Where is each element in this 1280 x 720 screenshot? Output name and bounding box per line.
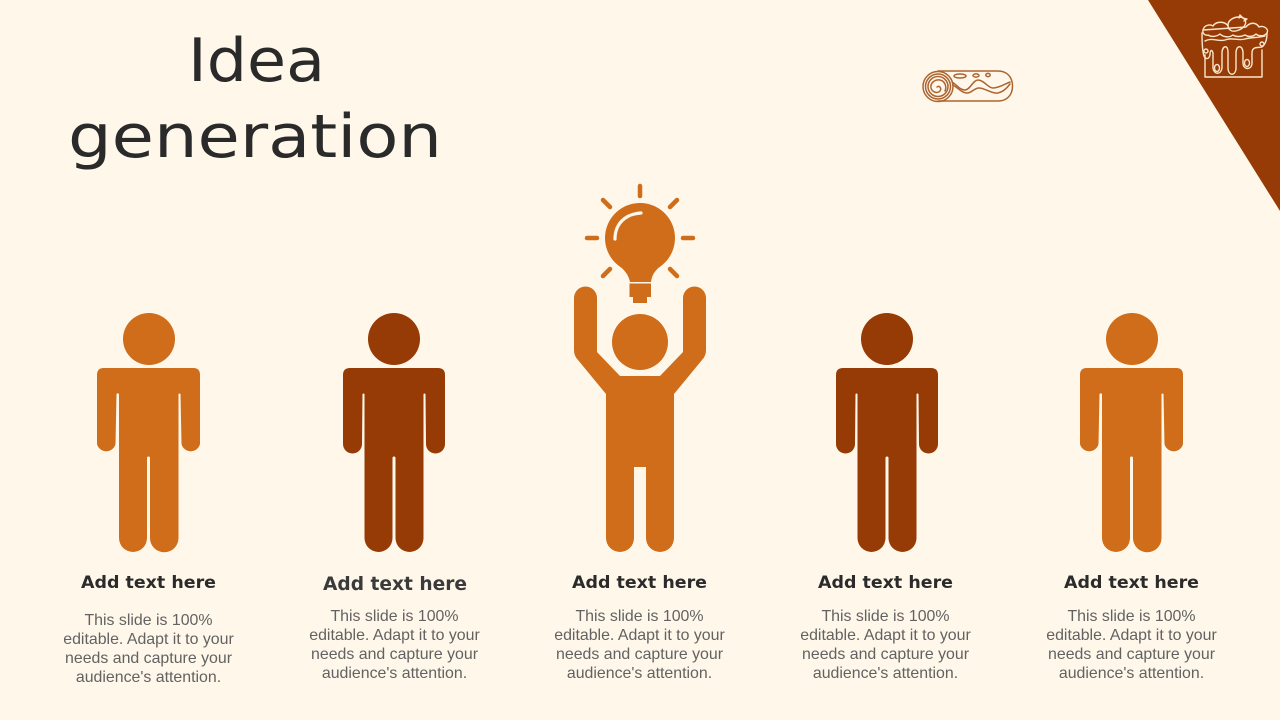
text block 4: needs and capture your <box>802 646 970 663</box>
title: Idea <box>188 26 325 96</box>
text block 3: This slide is 100% <box>575 608 704 625</box>
text block 1: needs and capture your <box>65 650 233 667</box>
title <box>68 26 442 172</box>
text block 3 <box>554 573 725 682</box>
text block 1 <box>63 573 234 686</box>
icon: swiss roll <box>923 71 1012 102</box>
text block 3: audience's attention. <box>567 665 712 682</box>
person 5 <box>1080 313 1183 552</box>
text block 3: Add text here <box>572 573 707 593</box>
text block 5: This slide is 100% <box>1067 608 1196 625</box>
title: generation <box>68 102 442 172</box>
text block 2 <box>309 573 480 682</box>
text block 5 <box>1046 573 1217 682</box>
text block 3: needs and capture your <box>556 646 724 663</box>
text block 2: needs and capture your <box>311 646 479 663</box>
text block 4: This slide is 100% <box>821 608 950 625</box>
text block 4 <box>800 573 971 682</box>
person 2 <box>343 313 445 552</box>
person 4 <box>836 313 938 552</box>
text block 2: Add text here <box>323 573 467 595</box>
text block 1: Add text here <box>81 573 216 593</box>
text block 4: editable. Adapt it to your <box>800 627 971 644</box>
icon: cake <box>1202 15 1267 77</box>
text block 2: editable. Adapt it to your <box>309 627 480 644</box>
text block 5: needs and capture your <box>1048 646 1216 663</box>
text block 5: audience's attention. <box>1059 665 1204 682</box>
person 3 with raised arms <box>574 286 706 552</box>
icon: light bulb <box>587 186 693 303</box>
person 1 <box>97 313 200 552</box>
text block 2: audience's attention. <box>322 665 467 682</box>
corner triangle <box>1148 0 1280 211</box>
text block 5: editable. Adapt it to your <box>1046 627 1217 644</box>
text block 3: editable. Adapt it to your <box>554 627 725 644</box>
text block 4: audience's attention. <box>813 665 958 682</box>
text block 2: This slide is 100% <box>330 608 459 625</box>
text block 1: This slide is 100% <box>84 612 213 629</box>
text block 1: editable. Adapt it to your <box>63 631 234 648</box>
text block 4: Add text here <box>818 573 953 593</box>
text block 1: audience's attention. <box>76 669 221 686</box>
text block 5: Add text here <box>1064 573 1199 593</box>
